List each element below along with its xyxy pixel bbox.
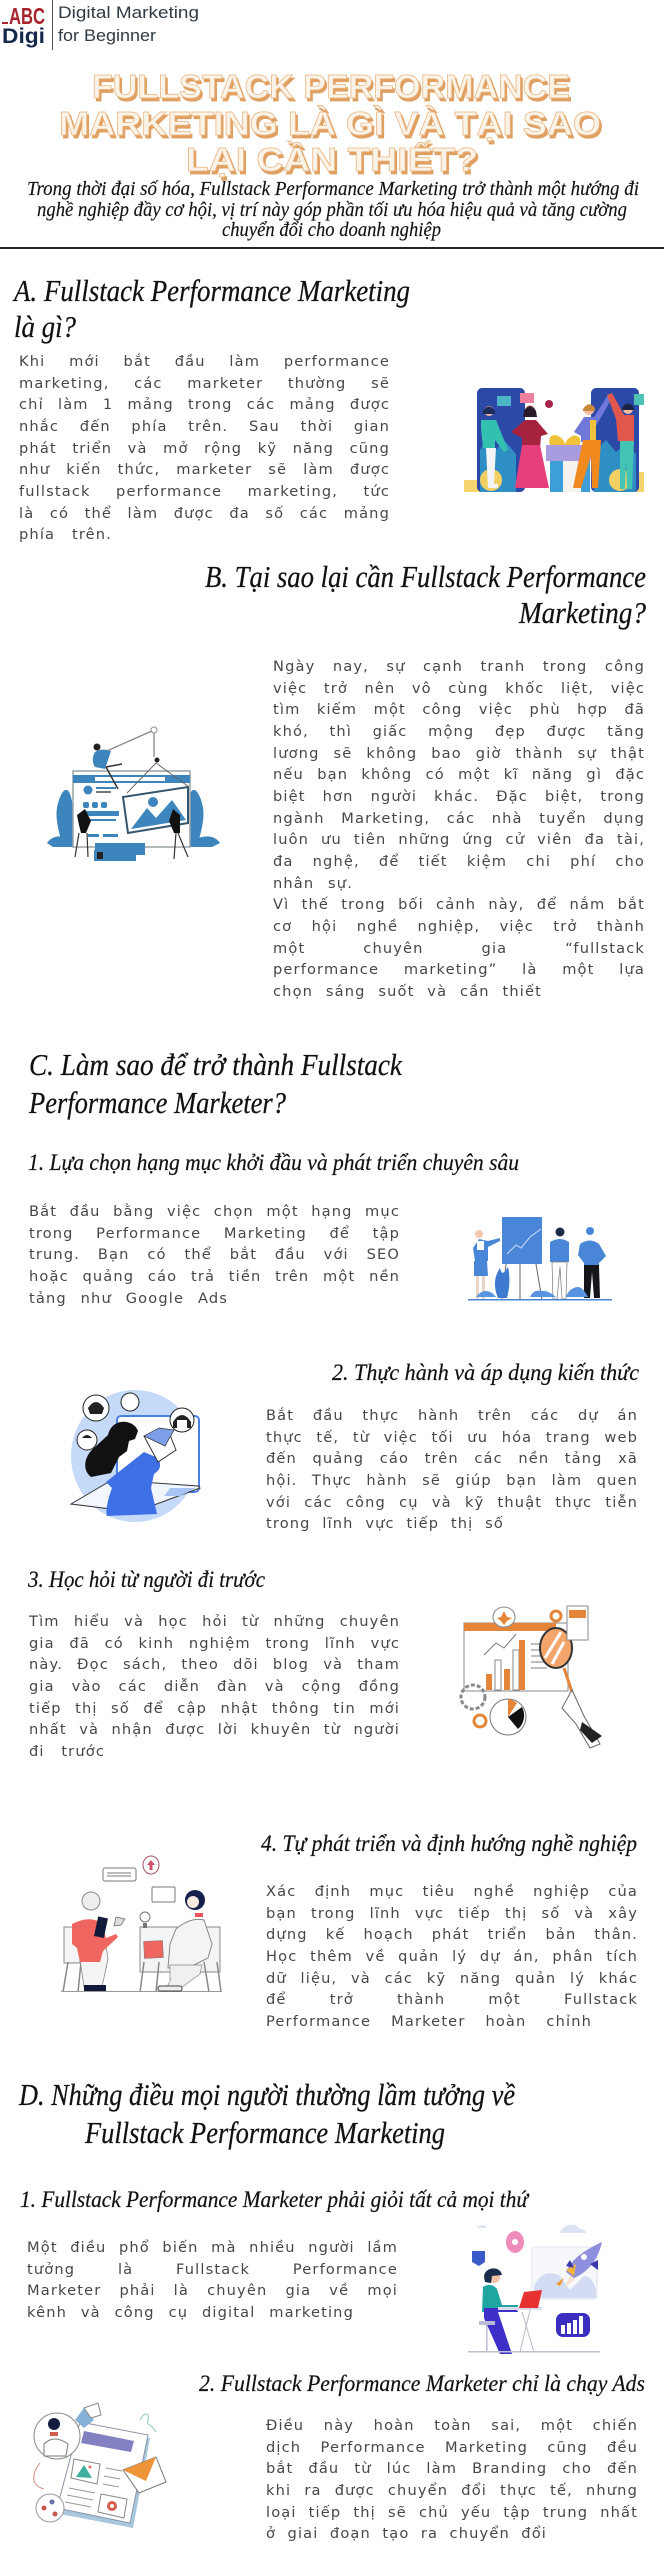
logo: ABC Digi: for Beginner	[58, 26, 156, 45]
illustration: presentation board with team	[468, 1217, 612, 1300]
text block: B body: đa nghệ, để tiết kiệm chi phí cho	[273, 853, 645, 870]
text block: B body: performance marketing” là một lựa	[273, 961, 645, 978]
title: FULLSTACK PERFORMANCE	[92, 68, 570, 105]
heading C	[28, 1047, 403, 1120]
subheading D2: 2. Fullstack Performance Marketer chỉ là chạy Ads	[199, 2371, 645, 2396]
text block: B body: ngành Marketing, các nhà tuyển dụng	[273, 810, 645, 827]
text block: C2 body: thực tế, từ việc tối ưu hóa trang web	[266, 1429, 638, 1446]
illustration: analytics window with magnifier	[461, 1606, 602, 1748]
text block: B body	[273, 658, 645, 1000]
title: MARKETING LÀ GÌ VÀ TẠI SAO	[59, 105, 601, 142]
title	[59, 68, 601, 178]
illustration: woman at laptop with rocket launch	[468, 2225, 602, 2354]
heading A: là gì?	[14, 309, 76, 344]
heading A	[12, 273, 410, 344]
logo: ABC Digi: ABC	[9, 3, 45, 29]
text block: B body: biệt hơn người khác. Đặc biệt, trong	[273, 788, 645, 805]
text block: C3 body: này. Đọc sách, theo dõi blog và tham	[29, 1656, 400, 1673]
text block: D1 body: Marketer phải là chuyên gia về mọi	[27, 2282, 398, 2299]
subheading D1: 1. Fullstack Performance Marketer phải giỏi tất cả mọi thứ	[20, 2187, 530, 2212]
text block: C1 body: tảng như Google Ads	[29, 1290, 228, 1307]
text block: C2 body: trong lĩnh vực tiếp thị số	[266, 1515, 504, 1532]
text block: C2 body: với các công cụ và kỹ thuật thực tiễn	[266, 1494, 638, 1511]
text block: C3 body: gia đã có kinh nghiệm trong lĩnh vực	[29, 1635, 400, 1652]
intro subtitle: Trong thời đại số hóa, Fullstack Performance Marketing trở thành một hướng đi	[27, 178, 639, 200]
text block: A body	[19, 353, 390, 543]
subheading C4: 4. Tự phát triển và định hướng nghề nghiệp	[261, 1831, 637, 1856]
text block: B body: luôn ưu tiên những ứng cử viên đa tài,	[273, 831, 645, 848]
illustration: team celebrating between two phones	[464, 388, 644, 492]
text block: B body: cơ hội nghề nghiệp, việc trở thành	[273, 918, 645, 935]
text block: C3 body: đi trước	[29, 1743, 105, 1760]
heading C: C. Làm sao để trở thành Fullstack	[29, 1047, 403, 1082]
text block: D2 body: ở giai đoạn tạo ra chuyển đổi	[266, 2525, 547, 2542]
text block: B body: một chuyên gia “fullstack	[273, 940, 645, 957]
heading A: A. Fullstack Performance Marketing	[12, 273, 410, 308]
text block: C2 body: Bắt đầu thực hành trên các dự án	[266, 1407, 638, 1424]
text block: C2 body: đến quảng cáo trên các nền tảng xã	[266, 1450, 638, 1467]
logo: ABC Digi: Digi	[2, 25, 45, 48]
intro subtitle	[27, 178, 639, 241]
heading B	[205, 559, 646, 630]
title: LẠI CẦN THIẾT?	[186, 141, 478, 178]
text block: C4 body	[266, 1883, 638, 2030]
text block: C3 body: nhất và nhận được lời khuyên từ người	[29, 1721, 400, 1738]
text block: C4 body: Xác định mục tiêu nghề nghiệp của	[266, 1883, 638, 1900]
heading B: Marketing?	[518, 595, 646, 630]
subheading C2: 2. Thực hành và áp dụng kiến thức	[332, 1360, 639, 1385]
text block: B body: Ngày nay, sự cạnh tranh trong công	[273, 658, 645, 675]
illustration: two people in conversation	[61, 1856, 222, 1992]
text block: A body: marketing, các marketer thường sẽ	[19, 375, 390, 392]
text block: D2 body: dịch Performance Marketing cũng đều	[266, 2439, 638, 2456]
text block: A body: như kiến thức, marketer sẽ làm được	[19, 461, 390, 478]
heading D	[18, 2077, 515, 2150]
subheading C3: 3. Học hỏi từ người đi trước	[27, 1567, 265, 1592]
text block: A body: là có thể làm được đa số các mảng	[19, 505, 390, 522]
text block: C3 body: Tìm hiểu và học hỏi từ những chuyên	[29, 1613, 400, 1630]
text block: B body: tìm kiếm một công việc phù hợp đã	[273, 701, 645, 718]
text block: D2 body	[266, 2417, 638, 2542]
heading D: D. Những điều mọi người thường lầm tưởng về	[18, 2077, 515, 2112]
subheading C1: 1. Lựa chọn hạng mục khởi đầu và phát triển chuyên sâu	[28, 1150, 519, 1175]
text block: B body: nhân sự.	[273, 875, 353, 892]
illustration: team assembling a web page	[47, 727, 220, 861]
text block: A body: phía trên.	[19, 526, 112, 543]
illustration: woman with laptop and avatars	[71, 1390, 200, 1522]
text block: D1 body: tưởng là Fullstack Performance	[27, 2261, 398, 2278]
text block: D1 body: kênh và công cụ digital marketing	[27, 2304, 354, 2321]
text block: C3 body	[28, 1613, 400, 1760]
text block: C3 body: gia vào các diễn đàn và cộng đồng	[29, 1678, 400, 1695]
logo: ABC Digi	[2, 0, 199, 50]
text block: C4 body: dựng kế hoạch phát triển bản thân.	[266, 1926, 638, 1943]
text block: B body: việc trở nên vô cùng khốc liệt, việc	[273, 680, 645, 697]
text block: A body: Khi mới bắt đầu làm performance	[19, 353, 390, 370]
text block: A body: nhắc đến phía trên. Sau thời gian	[19, 418, 390, 435]
text block: D1 body: Một điều phổ biến mà nhiều người lầm	[27, 2239, 398, 2256]
text block: C3 body: tiếp thị số để cập nhật thông tin mới	[29, 1700, 400, 1717]
text block: B body: chọn sáng suốt và cần thiết	[273, 983, 542, 1000]
text block: B body: Vì thế trong bối cảnh này, để nắm bắt	[273, 896, 645, 913]
text block: C1 body	[29, 1203, 400, 1307]
text block: D2 body: loại tiếp thị sẽ chủ yếu tập trung nhất	[266, 2504, 638, 2521]
text block: C4 body: dữ liệu, và các kỹ năng quản lý khác	[266, 1970, 638, 1987]
heading D: Fullstack Performance Marketing	[84, 2115, 445, 2150]
logo: ABC Digi: Digital Marketing	[58, 3, 199, 22]
text block: D2 body: khi ra được chuyển đổi thực tế, nhưng	[266, 2482, 638, 2499]
text block: C4 body: để trở thành một Fullstack	[266, 1991, 638, 2008]
text block: C4 body: bạn trong lĩnh vực tiếp thị số và xây	[266, 1905, 638, 1922]
text block: B body: khó, thì giấc mộng đẹp được tăng	[273, 723, 645, 740]
text block: C1 body: trong Performance Marketing để tập	[29, 1225, 400, 1242]
text block: A body: phát triển và mở rộng kỹ năng cũng	[19, 440, 390, 457]
text block: C2 body	[266, 1407, 638, 1532]
text block: C1 body: trung. Bạn có thể bắt đầu với SEO	[29, 1246, 400, 1263]
text block: A body: fullstack performance marketing, tức	[19, 483, 390, 500]
text block: C4 body: Performance Marketer hoàn chỉnh	[266, 2013, 592, 2030]
illustration: document with envelope and megaphone	[34, 2403, 166, 2528]
text block: B body: lương sẽ không bao giờ thành sự thật	[273, 745, 645, 762]
text block: D1 body	[27, 2239, 398, 2321]
intro subtitle: chuyển đổi cho doanh nghiệp	[222, 219, 441, 241]
heading C: Performance Marketer?	[28, 1085, 286, 1120]
text block: C1 body: hoặc quảng cáo trả tiền trên một nền	[29, 1268, 400, 1285]
text block: D2 body: bắt đầu từ lúc làm Branding cho đến	[266, 2460, 638, 2477]
text block: C4 body: Học thêm về quản lý dự án, phân tích	[266, 1948, 638, 1965]
intro subtitle: nghề nghiệp đầy cơ hội, vị trí này góp phần tối ưu hóa hiệu quả và tăng cường	[37, 199, 627, 221]
text block: C1 body: Bắt đầu bằng việc chọn một hạng mục	[29, 1203, 400, 1220]
text block: B body: nếu bạn không có một kĩ năng gì đặc	[273, 766, 645, 783]
text block: C2 body: hội. Thực hành sẽ giúp bạn làm quen	[266, 1472, 638, 1489]
text block: D2 body: Điều này hoàn toàn sai, một chiến	[266, 2417, 638, 2434]
text block: A body: chỉ làm 1 mảng trong các mảng được	[19, 396, 390, 413]
